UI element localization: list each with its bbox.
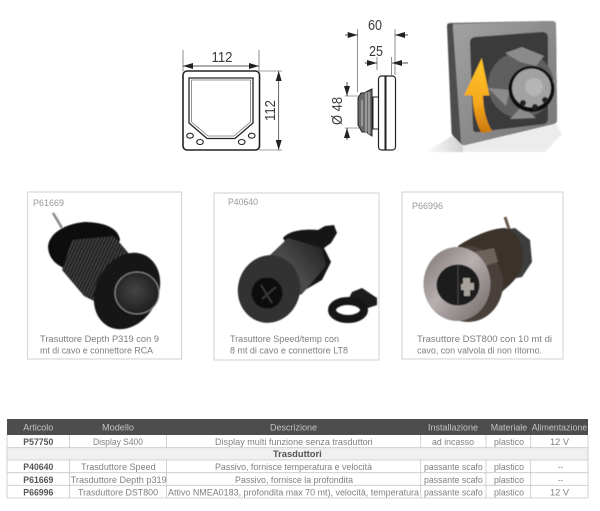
- table header: Materiale: [491, 422, 527, 432]
- row P40640: P40640: [23, 462, 53, 472]
- row P61669: [23, 475, 563, 485]
- mounting hub: [488, 47, 557, 119]
- row P40640: plastico: [494, 462, 524, 472]
- row P61669: Trasduttore Depth p319: [71, 475, 167, 485]
- display side profile: [358, 76, 396, 150]
- table header: Modello: [102, 422, 134, 432]
- caption: 8 mt di cavo e connettore LT8: [230, 346, 348, 356]
- table grid: [7, 435, 588, 498]
- row P66996: passante scafo: [424, 487, 483, 497]
- table header: Installazione: [428, 422, 478, 432]
- depth dimension 60: 60: [368, 18, 382, 34]
- row P40640: Trasduttore Speed: [81, 462, 156, 472]
- row P66996: P66996: [23, 487, 53, 497]
- product code: P40640: [228, 197, 258, 207]
- row P66996: Trasduttore DST800: [78, 487, 158, 497]
- row P57750: plastico: [494, 437, 524, 447]
- caption: [417, 334, 552, 356]
- section title: Trasduttori: [273, 449, 322, 459]
- row P40640: Passivo, fornisce temperatura e velocità: [215, 462, 372, 472]
- floor shadow: [425, 136, 500, 152]
- card border: [214, 193, 379, 360]
- row P66996: Attivo NMEA0183, profondita max 70 mt), velocità, temperatura: [168, 487, 419, 497]
- row P66996: plastico: [494, 487, 524, 497]
- row P57750: ad incasso: [432, 437, 474, 447]
- photo: DST800 transducer: [424, 217, 532, 322]
- panel: transducer P40640: [214, 193, 379, 360]
- technical drawing: front view: [183, 50, 282, 150]
- caption: [40, 334, 159, 356]
- row P61669: --: [558, 475, 563, 485]
- card border: [28, 192, 182, 359]
- row P40640: passante scafo: [424, 462, 483, 472]
- row P40640: --: [558, 462, 563, 472]
- caption: mt di cavo e connettore RCA: [40, 346, 154, 356]
- orange rotation arrow: [464, 58, 492, 133]
- row P57750: Display multi funzione senza trasduttori: [215, 437, 373, 447]
- specification table: [7, 419, 588, 498]
- height dimension 112: 112: [263, 100, 279, 121]
- row P66996: 12 V: [550, 487, 569, 497]
- row P57750: 12 V: [550, 437, 569, 447]
- caption: cavo, con valvola di non ritorno.: [417, 346, 542, 356]
- row P61669: P61669: [23, 475, 53, 485]
- row P61669: plastico: [494, 475, 524, 485]
- caption: Trasuttore DST800 con 10 mt di: [417, 334, 552, 345]
- panel: transducer P61669: [28, 192, 182, 359]
- product code: P66996: [412, 201, 443, 211]
- display outline: [183, 71, 260, 150]
- row P61669: passante scafo: [424, 475, 483, 485]
- panel: transducer P66996: [402, 192, 563, 359]
- row P66996: [23, 487, 569, 497]
- diameter dimension 48: Ø 48: [330, 97, 346, 125]
- depth dimension 25: 25: [369, 44, 383, 60]
- technical drawing: side view: [330, 18, 408, 150]
- row P57750: Display S400: [93, 437, 143, 447]
- table header: Articolo: [23, 422, 53, 432]
- caption: [230, 334, 348, 356]
- photo: depth transducer: [48, 213, 173, 341]
- table header: Alimentazione: [532, 422, 587, 432]
- card border: [402, 192, 563, 359]
- table header: [7, 419, 588, 435]
- recessed panel: [470, 32, 548, 132]
- caption: Trasuttore Speed/temp con: [230, 334, 339, 345]
- row P57750: P57750: [23, 437, 53, 447]
- caption: Trasuttore Depth P319 con 9: [40, 334, 159, 345]
- photo: speed and temperature transducer: [230, 225, 377, 330]
- width dimension 112: 112: [212, 50, 232, 66]
- product code: P61669: [33, 198, 64, 208]
- section band: [7, 448, 588, 460]
- row P57750: [23, 437, 569, 447]
- table header: Descrizione: [270, 422, 317, 432]
- row P40640: [23, 462, 563, 472]
- display frame: [447, 21, 557, 145]
- product photo: display mounting with orange arrow: [425, 21, 562, 152]
- row P61669: Passivo, fornisce la profondita: [235, 475, 353, 485]
